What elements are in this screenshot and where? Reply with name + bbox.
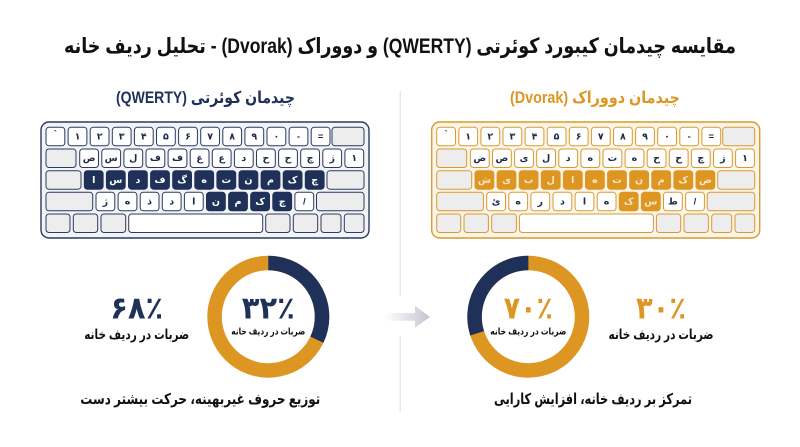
donut chart: Dvorak 70%: ۷۰٪	[504, 290, 553, 326]
keyboard: Dvorak: ۱	[742, 153, 748, 164]
keyboard: QWERTY: ل	[129, 153, 137, 164]
donut chart: Dvorak 70%	[461, 249, 596, 384]
donut chart: QWERTY 32%: ضربات در ردیف خانه	[231, 326, 305, 338]
keyboard: QWERTY: ژ	[328, 153, 335, 164]
keyboard: QWERTY: ۵	[163, 132, 169, 142]
keyboard: QWERTY: غ	[196, 153, 203, 164]
keyboard: Dvorak: ض	[473, 153, 486, 164]
keyboard: Dvorak: ۶	[576, 132, 582, 142]
keyboard: Dvorak: چ	[697, 153, 704, 164]
keyboard: QWERTY: چ	[311, 175, 318, 186]
stat: Dvorak 30%: ۳۰٪	[636, 290, 686, 326]
keyboard: QWERTY: ا	[192, 196, 195, 208]
keyboard: Dvorak: ه	[515, 196, 521, 208]
keyboard: Dvorak: ژ	[719, 153, 726, 164]
keyboard: Dvorak: ش	[478, 175, 491, 186]
keyboard: Dvorak	[432, 122, 760, 238]
keyboard: QWERTY: ژ	[102, 196, 108, 208]
keyboard: Dvorak: ض	[699, 175, 712, 186]
keyboard: QWERTY: ن	[244, 175, 252, 186]
keyboard: Dvorak: ر	[537, 196, 543, 208]
keyboard: QWERTY: ف	[150, 153, 161, 164]
stat: Dvorak 30%: ضربات در ردیف خانه	[608, 327, 714, 342]
heading: Dvorak: چیدمان دووراک (Dvorak)	[510, 89, 680, 108]
keyboard: QWERTY: ا	[92, 175, 95, 186]
keyboard: Dvorak: ۱	[465, 132, 471, 142]
keyboard: Dvorak: ل	[547, 175, 555, 186]
keyboard: Dvorak: ب	[524, 175, 533, 186]
keyboard: Dvorak: /	[694, 196, 697, 208]
keyboard: QWERTY: `	[54, 129, 57, 140]
keyboard: Dvorak: م	[658, 175, 665, 186]
keyboard: QWERTY: ع	[218, 153, 225, 164]
keyboard: QWERTY: چ	[279, 196, 286, 208]
keyboard: QWERTY: د	[135, 175, 140, 186]
stat: QWERTY 68%	[84, 290, 189, 342]
keyboard: QWERTY: =	[318, 132, 324, 142]
keyboard: QWERTY: م	[235, 196, 242, 208]
caption: Dvorak: تمرکز بر ردیف خانه، افزایش کارایی	[494, 391, 692, 408]
keyboard: Dvorak: د	[560, 196, 565, 208]
keyboard: Dvorak: ه	[604, 196, 610, 208]
keyboard: QWERTY: م	[267, 175, 274, 186]
keyboard: QWERTY: ۴	[141, 132, 147, 142]
keyboard: Dvorak: ا	[571, 175, 574, 186]
keyboard: Dvorak: ۴	[532, 132, 538, 142]
keyboard: QWERTY	[41, 122, 369, 238]
keyboard: Dvorak: ه	[592, 175, 598, 186]
keyboard: QWERTY: ح	[285, 153, 292, 164]
keyboard: Dvorak: د	[566, 153, 571, 164]
caption: QWERTY: توزیع حروف غیربهینه، حرکت بیشتر دست	[80, 391, 320, 408]
keyboard: Dvorak: ی	[520, 153, 529, 164]
keyboard: Dvorak: ۲	[487, 132, 493, 142]
keyboard: QWERTY: -	[297, 132, 300, 142]
keyboard: QWERTY: ف	[154, 175, 166, 186]
keyboard: Dvorak: =	[709, 132, 715, 142]
keyboard: Dvorak: ۹	[642, 132, 648, 142]
keyboard: QWERTY: ک	[288, 175, 298, 186]
keyboard: QWERTY: س	[109, 175, 122, 186]
keyboard: QWERTY: /	[303, 196, 306, 208]
keyboard: Dvorak: ۳	[509, 132, 515, 142]
keyboard: QWERTY: ۰	[273, 132, 279, 142]
donut chart: QWERTY 32%: ۳۲٪	[242, 290, 295, 326]
keyboard: QWERTY: ک	[255, 196, 265, 208]
keyboard: Dvorak: ن	[635, 175, 643, 186]
keyboard: Dvorak: ح	[653, 153, 660, 164]
keyboard: Dvorak: ا	[583, 196, 586, 208]
keyboard: QWERTY: ۱	[351, 153, 357, 164]
keyboard: QWERTY: چ	[307, 153, 314, 164]
keyboard: QWERTY: ه	[201, 175, 207, 186]
keyboard: Dvorak: ۸	[620, 132, 626, 142]
keyboard: QWERTY: ن	[212, 196, 220, 208]
keyboard: Dvorak: ۵	[554, 132, 560, 142]
center divider	[400, 91, 401, 412]
keyboard: Dvorak: س	[644, 196, 657, 208]
heading: QWERTY: چیدمان کوئرتی (QWERTY)	[116, 89, 295, 108]
keyboard: Dvorak: ۰	[664, 132, 670, 142]
keyboard: QWERTY: ت	[222, 175, 231, 186]
keyboard: Dvorak: ت	[612, 175, 622, 186]
keyboard: QWERTY: ف	[172, 153, 183, 164]
keyboard: QWERTY: ۸	[229, 132, 235, 142]
keyboard: QWERTY: ۳	[119, 132, 125, 142]
title: مقایسه چیدمان کیبورد کوئرتی (QWERTY) و دووراک (Dvorak) - تحلیل ردیف خانه	[64, 35, 736, 58]
keyboard: QWERTY: د	[241, 153, 246, 164]
keyboard: QWERTY: ۹	[251, 132, 257, 142]
stat: QWERTY 68%: ۶۸٪	[110, 290, 163, 326]
keyboard: QWERTY: س	[105, 153, 118, 164]
keyboard: QWERTY: د	[169, 196, 174, 208]
keyboard: QWERTY: ه	[125, 196, 131, 208]
keyboard: Dvorak: -	[688, 132, 691, 142]
keyboard: Dvorak: `	[445, 129, 448, 140]
keyboard: QWERTY: ص	[83, 153, 96, 164]
keyboard: Dvorak: ت	[608, 153, 617, 164]
stat: Dvorak 30%	[608, 290, 714, 342]
donut chart: QWERTY 32%	[215, 263, 322, 370]
keyboard: Dvorak: ه	[632, 153, 638, 164]
keyboard: QWERTY: ۶	[185, 132, 191, 142]
donut chart: Dvorak 70%: ضربات در ردیف خانه	[490, 326, 566, 338]
arrow	[385, 306, 430, 328]
keyboard: QWERTY: ذ	[147, 196, 152, 208]
keyboard: Dvorak: ئ	[492, 196, 501, 208]
keyboard: Dvorak: ه	[587, 153, 593, 164]
keyboard: QWERTY: گ	[177, 174, 187, 186]
keyboard: QWERTY: ۲	[97, 132, 103, 142]
keyboard: Dvorak: ۷	[598, 132, 604, 142]
keyboard: Dvorak: ص	[496, 153, 509, 164]
keyboard: QWERTY: ح	[262, 153, 269, 164]
keyboard: Dvorak: ل	[542, 153, 550, 164]
keyboard: QWERTY: ۱	[75, 132, 80, 142]
keyboard: QWERTY: ۷	[207, 132, 213, 142]
keyboard: Dvorak: ح	[675, 153, 682, 164]
keyboard: Dvorak: ط	[668, 196, 678, 208]
keyboard: Dvorak: ک	[624, 196, 634, 208]
keyboard: Dvorak: ی	[502, 175, 511, 186]
keyboard: Dvorak: ک	[678, 175, 688, 186]
stat: QWERTY 68%: ضربات در ردیف خانه	[84, 327, 189, 342]
